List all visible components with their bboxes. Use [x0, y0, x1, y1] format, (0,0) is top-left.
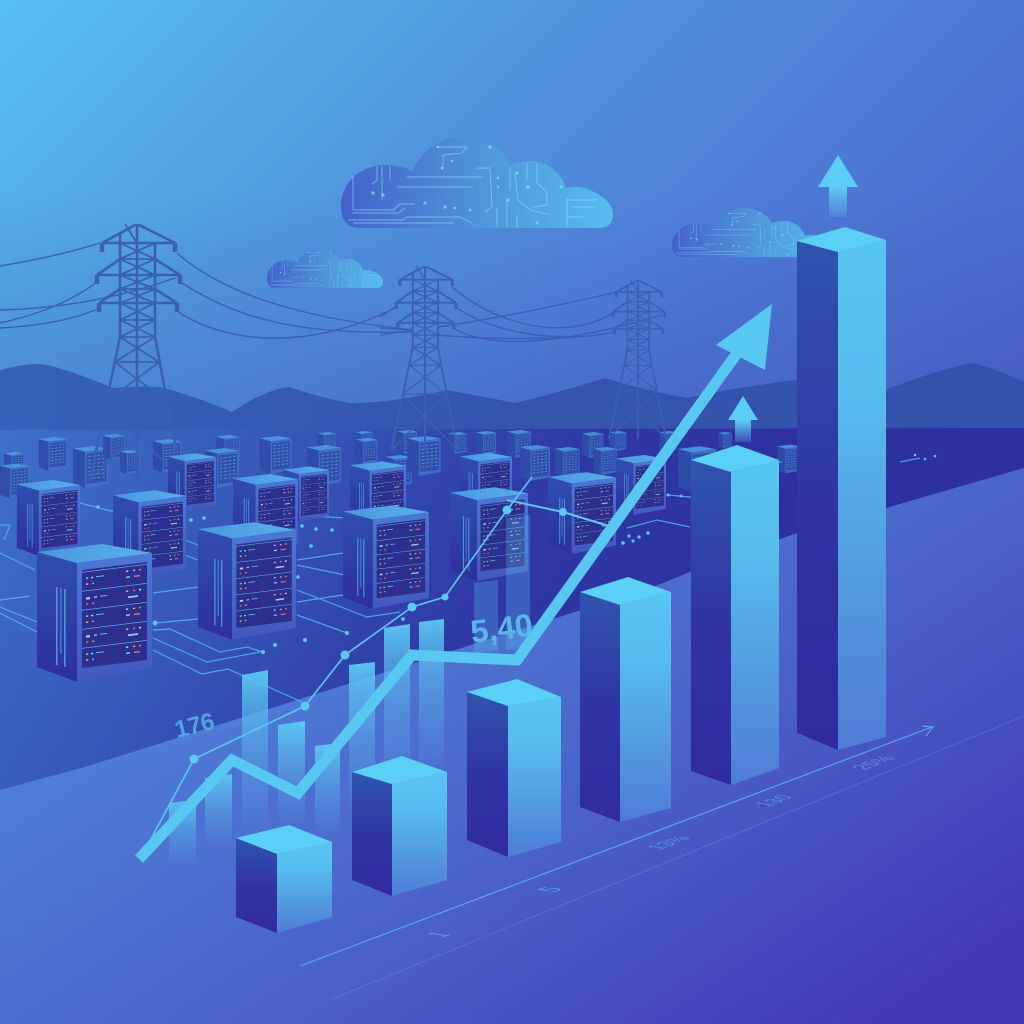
floor axis lines: [300, 716, 1024, 1000]
axis label 130: 130: [749, 794, 798, 808]
pylon centre: [391, 266, 457, 450]
power lines: [0, 243, 662, 342]
thin trend line with nodes: [145, 477, 612, 850]
pylon right: [609, 280, 666, 439]
large circuit cloud: [341, 137, 613, 228]
floor plane: [0, 468, 1024, 1024]
ground band behind the floor: [0, 428, 1024, 794]
bar 2: [352, 756, 447, 896]
value label 176: 176: [172, 708, 217, 744]
servers front row: [37, 505, 429, 682]
bar 6: [797, 227, 886, 750]
small circuit cloud: [267, 248, 383, 288]
translucent bars over the server: [474, 515, 530, 654]
sky shading toward the horizon: [0, 190, 1024, 440]
up arrow above bar 6: [818, 155, 858, 217]
circuit nodes: [96, 454, 936, 654]
main growth arrow: [139, 304, 772, 859]
servers middle rows: [17, 453, 666, 581]
right circuit cloud: [672, 208, 832, 257]
up arrow above bar 5: [728, 396, 758, 442]
translucent background bars: [169, 619, 444, 865]
mountain range: [0, 363, 1024, 440]
value label 5,40: 5,40: [468, 607, 535, 650]
distant server rows: [0, 430, 801, 498]
axis label 13%: 13%: [641, 835, 696, 851]
bar 5: [691, 445, 779, 785]
circuit traces on the ground: [0, 458, 920, 702]
bar 3: [467, 679, 561, 857]
axis label 25%: 25%: [846, 755, 901, 771]
bar 4: [580, 577, 671, 822]
axis label 1: 1: [419, 930, 457, 939]
bar 1: [236, 825, 332, 933]
axis label 5: 5: [531, 885, 569, 894]
pylon left: [90, 224, 182, 480]
